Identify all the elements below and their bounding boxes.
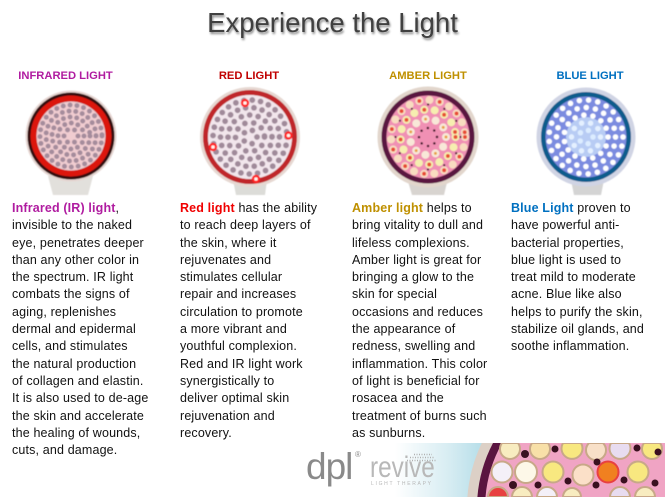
text: amber: redness, swelling and — [352, 339, 475, 353]
banner background — [290, 443, 665, 497]
text: red: the skin, where it — [180, 236, 276, 250]
text: amber: of light is beneficial for — [352, 374, 480, 388]
logo: dpl: ® — [355, 450, 361, 459]
text: red: circulation to promote — [180, 305, 303, 319]
text: amber — [352, 201, 487, 440]
text: amber: lifeless complexions. — [352, 236, 470, 250]
title: Experience the Light — [207, 7, 458, 38]
text: amber: bringing a glow to the — [352, 270, 474, 284]
text: amber: occasions and reduces — [352, 305, 483, 319]
heading: infrared: INFRARED LIGHT — [18, 70, 113, 82]
heading: blue: BLUE LIGHT — [556, 70, 624, 82]
text: infrared: the spectrum. IR light — [12, 270, 133, 284]
text: blue: soothe inflammation. — [511, 339, 629, 353]
icon: amber device — [378, 86, 478, 195]
text: blue: blue light is used to — [511, 253, 621, 267]
text: blue: treat mild to moderate — [511, 270, 636, 284]
tagline: LIGHT THERAPY — [371, 481, 433, 487]
text: red — [180, 201, 317, 440]
text: red: to reach deep layers of — [180, 218, 311, 232]
text: infrared: the natural production — [12, 357, 136, 371]
text: infrared: cuts, and damage. — [12, 443, 117, 457]
text: infrared: It is also used to de-age — [12, 391, 148, 405]
text: amber: bring vitality to dull and — [352, 218, 483, 232]
text: red: a more vibrant and — [180, 322, 287, 336]
logo: revive — [370, 452, 436, 487]
text: infrared: aging, replenishes — [12, 305, 116, 319]
text: amber: rosacea and the — [352, 391, 444, 405]
text: red: rejuvenates and — [180, 253, 271, 267]
text: infrared: the skin and accelerate — [12, 409, 144, 423]
text: amber: the appearance of — [352, 322, 455, 336]
icon: blue device — [536, 88, 636, 195]
text: red: synergistically to — [180, 374, 274, 388]
icon: large amber device — [468, 443, 665, 497]
text: blue: helps to purify the skin, — [511, 305, 643, 319]
text: red: rejuvenation and — [180, 409, 275, 423]
text: amber: inflammation. This color — [352, 357, 487, 371]
banner — [406, 443, 665, 497]
text: blue — [511, 201, 644, 353]
text: blue: bacterial properties, — [511, 236, 624, 250]
text: red: repair and increases — [180, 287, 296, 301]
text: infrared: invisible to the naked — [12, 218, 132, 232]
text: infrared: dermal and epidermal — [12, 322, 136, 336]
text: infrared: the healing of wounds, — [12, 426, 140, 440]
text: red: deliver optimal skin — [180, 391, 289, 405]
text: amber: Amber light helps to — [352, 201, 472, 215]
logo: dpl: dpl — [306, 447, 352, 487]
icon: infrared device — [26, 90, 116, 195]
heading: red: RED LIGHT — [219, 70, 279, 82]
text: red: Red light has the ability — [180, 201, 317, 215]
text: blue: Blue Light proven to — [511, 201, 631, 215]
text: blue: stabilize oil glands, and — [511, 322, 644, 336]
text: red: youthful complexion. — [180, 339, 297, 353]
icon: dotted arc — [407, 454, 436, 462]
text: amber: skin for special — [352, 287, 437, 301]
text: red: Red and IR light work — [180, 357, 303, 371]
text: infrared: combats the signs of — [12, 287, 130, 301]
text: infrared: eye, penetrates deeper — [12, 236, 144, 250]
text: amber: treatment of burns such — [352, 409, 487, 423]
text: blue: acne. Blue like also — [511, 287, 622, 301]
text: red: recovery. — [180, 426, 232, 440]
text: amber: as sunburns. — [352, 426, 425, 440]
text: infrared: Infrared (IR) light, — [12, 201, 119, 215]
text: infrared: of collagen and elastin. — [12, 374, 143, 388]
text: infrared — [12, 201, 148, 457]
text: amber: Amber light is great for — [352, 253, 481, 267]
text: red: stimulates cellular — [180, 270, 282, 284]
text: infrared: than any other color in — [12, 253, 139, 267]
text: infrared: cells, and stimulates — [12, 339, 128, 353]
text: blue: have powerful anti- — [511, 218, 619, 232]
device icons — [25, 86, 636, 196]
icon: red device — [200, 87, 300, 195]
heading: amber: AMBER LIGHT — [389, 70, 467, 82]
